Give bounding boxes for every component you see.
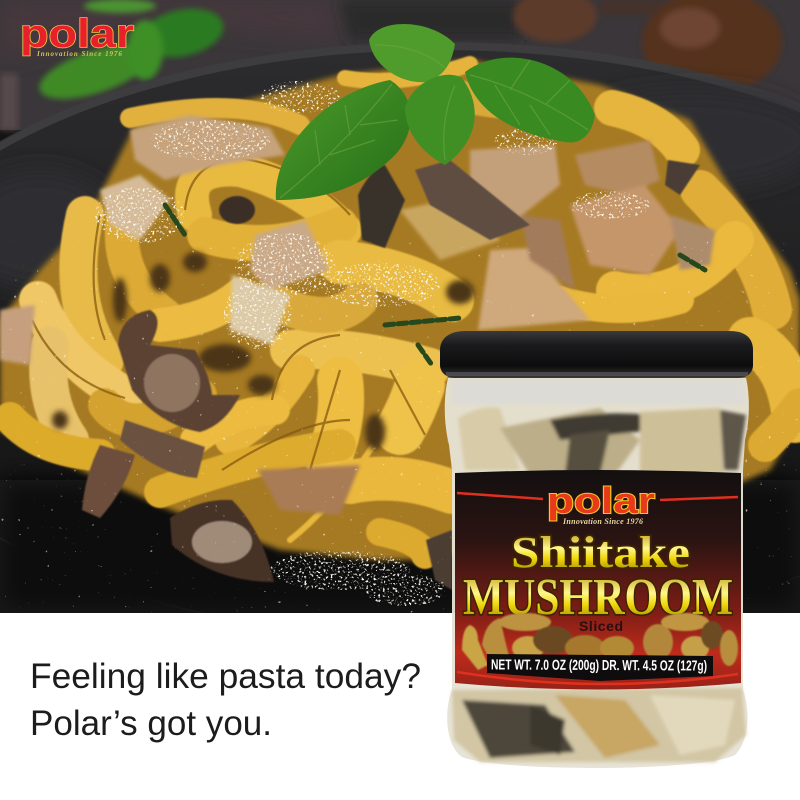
white footer panel xyxy=(0,613,800,800)
product jar xyxy=(440,331,753,768)
tagline text: Polar’s got you. xyxy=(30,704,272,743)
label Sliced: Sliced xyxy=(579,618,623,634)
grated cheese xyxy=(0,81,800,613)
jar lid xyxy=(440,331,753,378)
blurred basil behind logo xyxy=(33,0,228,110)
black plate xyxy=(0,42,800,638)
pasta mound xyxy=(0,60,800,560)
jar lower contents xyxy=(452,688,746,762)
jar glass body xyxy=(445,378,749,768)
label polar logo: polar xyxy=(547,480,655,521)
sliced mushrooms xyxy=(82,160,700,590)
chicken pieces xyxy=(0,115,715,515)
jar upper contents xyxy=(452,380,746,475)
label polar logo: Innovation Since 1976 xyxy=(562,517,643,526)
label polar logo xyxy=(548,486,656,524)
label mushroom illustration xyxy=(462,613,738,670)
blurred whole mushrooms xyxy=(513,0,782,94)
tagline text xyxy=(30,657,421,743)
thyme sprig xyxy=(165,205,705,365)
label red rules xyxy=(457,493,738,684)
label MUSHROOM: MUSHROOM xyxy=(463,569,733,626)
basil leaves xyxy=(276,24,595,200)
stone table backdrop xyxy=(0,0,800,130)
net weight text: NET WT. 7.0 OZ (200g) DR. WT. 4.5 OZ (127g) xyxy=(491,657,707,675)
pasta dark gaps xyxy=(48,248,478,454)
food photo background xyxy=(0,0,800,638)
tagline text: Feeling like pasta today? xyxy=(30,657,421,696)
logo: polar top left: polar xyxy=(20,12,134,56)
product label xyxy=(455,465,741,700)
label Shiitake: Shiitake xyxy=(511,528,690,577)
logo: polar top left: Innovation Since 1976 xyxy=(36,50,122,58)
net weight band xyxy=(487,654,713,681)
